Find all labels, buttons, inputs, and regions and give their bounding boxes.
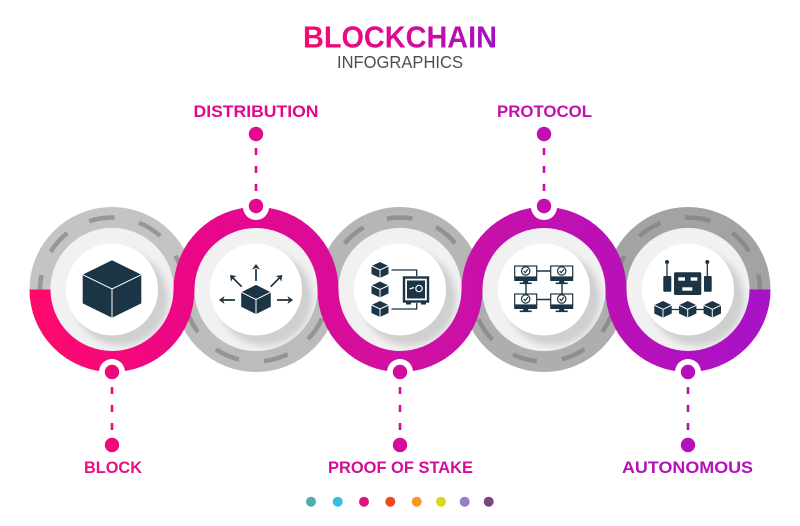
step 4: protocol: PROTOCOL xyxy=(497,102,592,121)
title: BLOCKCHAIN xyxy=(303,20,497,54)
step 1: block: BLOCK xyxy=(84,458,143,477)
step 2: distribution: DISTRIBUTION xyxy=(194,102,318,121)
icon: cube xyxy=(83,260,141,318)
icon: networked monitors xyxy=(514,266,573,312)
step 3: proof of stake: PROOF OF STAKE xyxy=(328,458,473,477)
step 2: distribution xyxy=(194,102,318,314)
colour palette dots xyxy=(306,497,494,507)
step 5: autonomous xyxy=(622,260,753,477)
grey dashed rings xyxy=(21,199,762,380)
icon: cube with arrows xyxy=(219,264,293,314)
icon: robot with cubes xyxy=(654,260,721,318)
step 1: block xyxy=(83,260,143,477)
title: INFOGRAPHICS xyxy=(337,52,463,72)
icon: cubes and safe xyxy=(372,262,428,317)
white inner discs xyxy=(50,228,750,351)
title xyxy=(303,20,497,72)
step 4: protocol xyxy=(497,102,592,312)
step 3: proof of stake xyxy=(328,262,473,477)
wave ribbon xyxy=(40,218,760,362)
step 5: autonomous: AUTONOMOUS xyxy=(622,458,753,477)
